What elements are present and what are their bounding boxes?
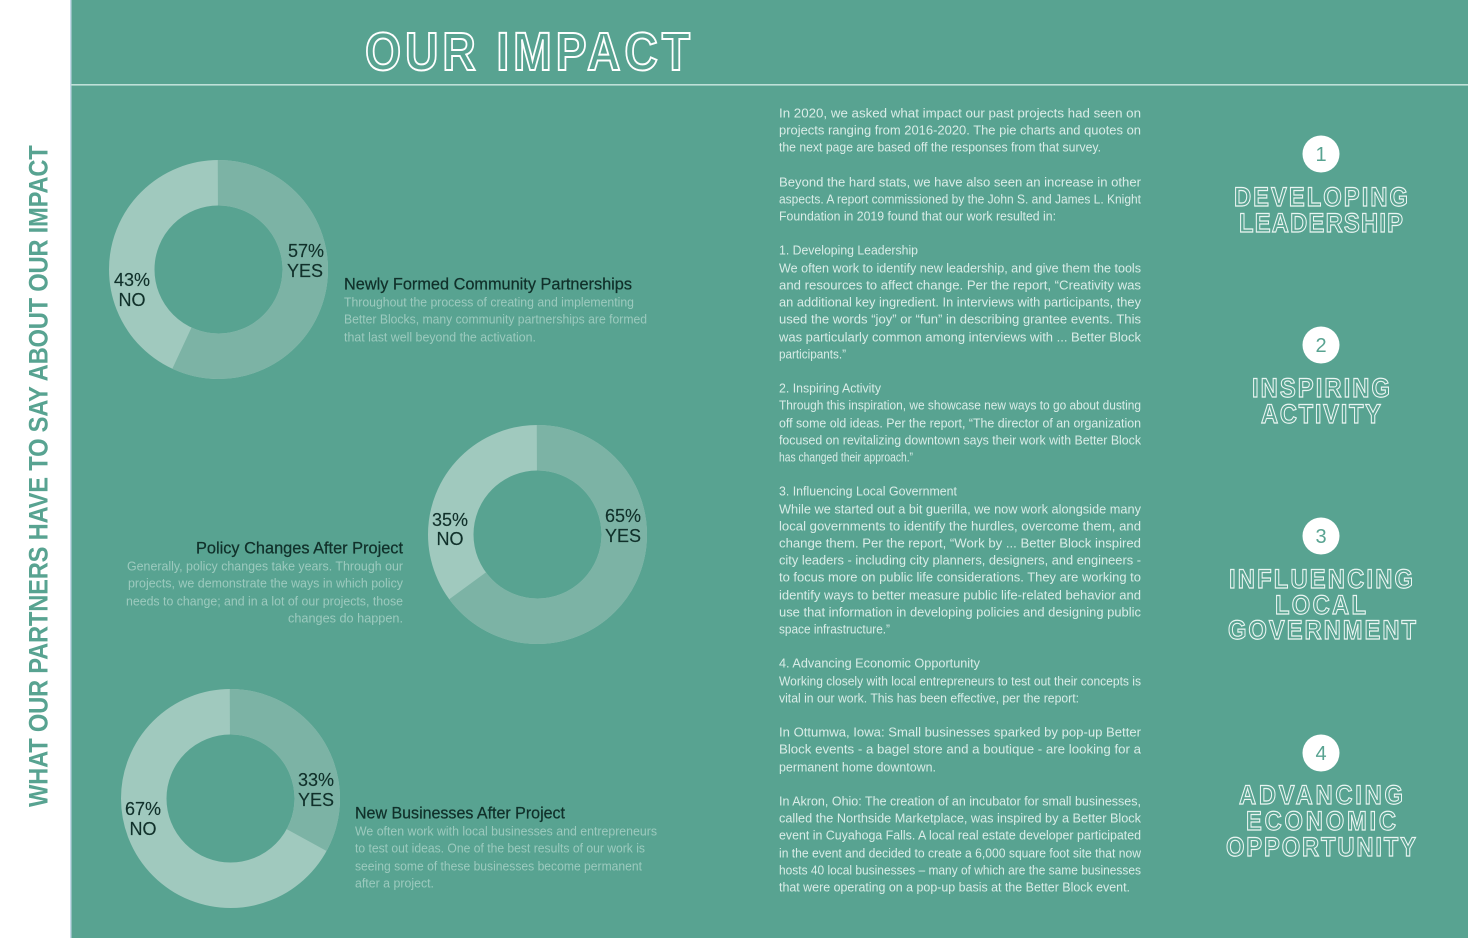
partnerships description: Better Blocks, many community partnerships are formed	[344, 312, 647, 326]
outcome 3: influencing local government: GOVERNMENT	[1228, 616, 1416, 645]
outcome 2: inspiring activity: ACTIVITY	[1261, 400, 1381, 429]
partnerships description: Throughout the process of creating and implementing	[344, 294, 634, 310]
donut chart: 33% yes 67% no	[125, 712, 334, 885]
body text column: 3. Influencing Local Government	[779, 484, 957, 498]
body text column: change them. Per the report, “Work by ... Better Block inspired	[779, 536, 1141, 550]
donut chart: 65% yes 35% no: 65%	[605, 506, 641, 526]
donut chart: 57% yes 43% no: YES	[287, 261, 323, 281]
policy description: needs to change; and in a lot of our projects, those	[126, 594, 403, 608]
body text column: Block events - a bagel store and a boutique - are looking for a	[779, 742, 1142, 756]
body text column: was particularly common among interviews with ... Better Block	[778, 330, 1141, 344]
policy description	[126, 558, 404, 626]
policy description: changes do happen.	[288, 610, 403, 626]
donut chart: 33% yes 67% no: YES	[298, 790, 334, 810]
body text column: event in Cuyahoga Falls. A local real estate developer participated	[779, 828, 1141, 842]
body text column: space infrastructure.”	[779, 622, 890, 636]
businesses description: after a project.	[355, 876, 434, 890]
outcome 1: developing leadership: DEVELOPING	[1234, 183, 1408, 212]
body text column	[778, 106, 1142, 894]
body text column: off some old ideas. Per the report, “The director of an organization	[779, 416, 1141, 430]
body text column: use that information in developing policies and designing public	[779, 604, 1141, 620]
businesses description: We often work with local businesses and entrepreneurs	[355, 824, 657, 838]
body text column: While we started out a bit guerilla, we now work alongside many	[779, 502, 1141, 516]
icon: number badge 1	[1302, 136, 1340, 172]
outcome 2: inspiring activity	[1252, 326, 1390, 429]
body text column: that were operating on a pop-up basis at the Better Block event.	[779, 880, 1130, 894]
panel: community partnerships	[114, 183, 647, 356]
outcome 1: developing leadership: LEADERSHIP	[1239, 209, 1403, 238]
body text column: identify ways to better measure public life-related behavior and	[779, 588, 1141, 602]
donut chart: 65% yes 35% no: 35%	[432, 510, 468, 530]
businesses description: seeing some of these businesses become permanent	[355, 858, 642, 874]
body text column: hosts 40 local businesses – many of which are the same businesses	[779, 862, 1141, 878]
body text column: in the event and decided to create a 6,000 square foot site that now	[779, 846, 1142, 860]
donut chart: 33% yes 67% no: 67%	[125, 799, 161, 819]
icon: number badge 1: 1	[1315, 144, 1327, 166]
panel: policy changes	[126, 448, 641, 626]
body text column: vital in our work. This has been effective, per the report:	[779, 690, 1079, 706]
sidebar vertical heading: WHAT OUR PARTNERS HAVE TO SAY ABOUT OUR IMPACT	[24, 145, 54, 807]
donut chart: 65% yes 35% no	[432, 448, 641, 621]
left white sidebar	[0, 0, 72, 938]
donut chart: 57% yes 43% no: 57%	[288, 241, 324, 261]
policy heading: Policy Changes After Project	[196, 538, 403, 558]
body text column: to focus more on public life considerations. They are working to	[779, 570, 1141, 584]
body text column: permanent home downtown.	[779, 760, 936, 774]
partnerships description	[344, 294, 647, 344]
body text column: the next page are based off the responses from that survey.	[779, 140, 1101, 154]
icon: number badge 4: 4	[1315, 743, 1327, 765]
panel: new businesses	[125, 712, 657, 890]
outcome 4: advancing economic opportunity	[1226, 734, 1416, 862]
body text column: Through this inspiration, we showcase new ways to go about dusting	[779, 398, 1141, 412]
outcome 3: influencing local government: INFLUENCING	[1229, 565, 1413, 594]
outcome 1: developing leadership	[1234, 136, 1408, 238]
title: OUR IMPACT	[365, 21, 690, 82]
policy description: projects, we demonstrate the ways in which policy	[128, 576, 403, 590]
donut chart: 57% yes 43% no: 43%	[114, 270, 150, 290]
businesses heading: New Businesses After Project	[355, 804, 565, 822]
donut chart: 57% yes 43% no	[114, 183, 324, 356]
body text column: We often work to identify new leadership, and give them the tools	[779, 260, 1141, 276]
body text column: In Akron, Ohio: The creation of an incubator for small businesses,	[779, 794, 1141, 808]
body text column: 2. Inspiring Activity	[779, 380, 881, 396]
body text column: aspects. A report commissioned by the John S. and James L. Knight	[779, 192, 1141, 206]
donut chart: 65% yes 35% no: YES	[605, 526, 641, 546]
outcome 4: advancing economic opportunity: ECONOMIC	[1246, 807, 1396, 836]
icon: number badge 2: 2	[1315, 335, 1327, 357]
body text column: Beyond the hard stats, we have also seen an increase in other	[779, 174, 1142, 190]
donut chart: 33% yes 67% no: NO	[130, 819, 156, 839]
policy description: Generally, policy changes take years. Through our	[127, 558, 404, 574]
body text column: used the words “joy” or “fun” in describing grantee events. This	[779, 312, 1141, 326]
icon: number badge 3: 3	[1315, 526, 1327, 548]
businesses description: to test out ideas. One of the best results of our work is	[355, 840, 645, 856]
outcome 3: influencing local government	[1228, 518, 1416, 645]
outcome 4: advancing economic opportunity: ADVANCING	[1239, 781, 1403, 810]
body text column: In Ottumwa, Iowa: Small businesses sparked by pop-up Better	[779, 724, 1142, 740]
body text column: called the Northside Marketplace, was inspired by a Better Block	[779, 810, 1141, 826]
body text column: participants.”	[779, 346, 846, 362]
donut chart: 33% yes 67% no: 33%	[298, 770, 334, 790]
body text column: Working closely with local entrepreneurs to test out their concepts is	[779, 674, 1141, 688]
body text column: and resources to affect change. Per the report, “Creativity was	[779, 278, 1142, 292]
outcome 3: influencing local government: LOCAL	[1275, 591, 1366, 620]
donut chart: 57% yes 43% no: NO	[118, 290, 146, 310]
outcome 4: advancing economic opportunity: OPPORTUNITY	[1226, 833, 1416, 862]
body text column: projects ranging from 2016-2020. The pie charts and quotes on	[779, 122, 1141, 138]
body text column: an additional key ingredient. In interviews with participants, they	[779, 294, 1141, 310]
partnerships description: that last well beyond the activation.	[344, 330, 536, 344]
body text column: 4. Advancing Economic Opportunity	[779, 656, 980, 670]
body text column: has changed their approach.”	[779, 450, 913, 464]
body text column: In 2020, we asked what impact our past projects had seen on	[779, 106, 1141, 120]
body text column: 1. Developing Leadership	[779, 242, 918, 258]
body text column: focused on revitalizing downtown says their work with Better Block	[779, 432, 1141, 448]
businesses description	[355, 824, 657, 890]
body text column: city leaders - including city planners, designers, and engineers -	[779, 552, 1141, 568]
body text column: local governments to identify the hurdles, overcome them, and	[779, 518, 1141, 534]
outcome 2: inspiring activity: INSPIRING	[1252, 374, 1390, 403]
icon: number badge 4	[1302, 734, 1340, 772]
icon: number badge 3	[1302, 518, 1340, 554]
body text column: Foundation in 2019 found that our work resulted in:	[779, 208, 1056, 224]
partnerships heading: Newly Formed Community Partnerships	[344, 274, 632, 294]
donut chart: 65% yes 35% no: NO	[436, 529, 464, 549]
